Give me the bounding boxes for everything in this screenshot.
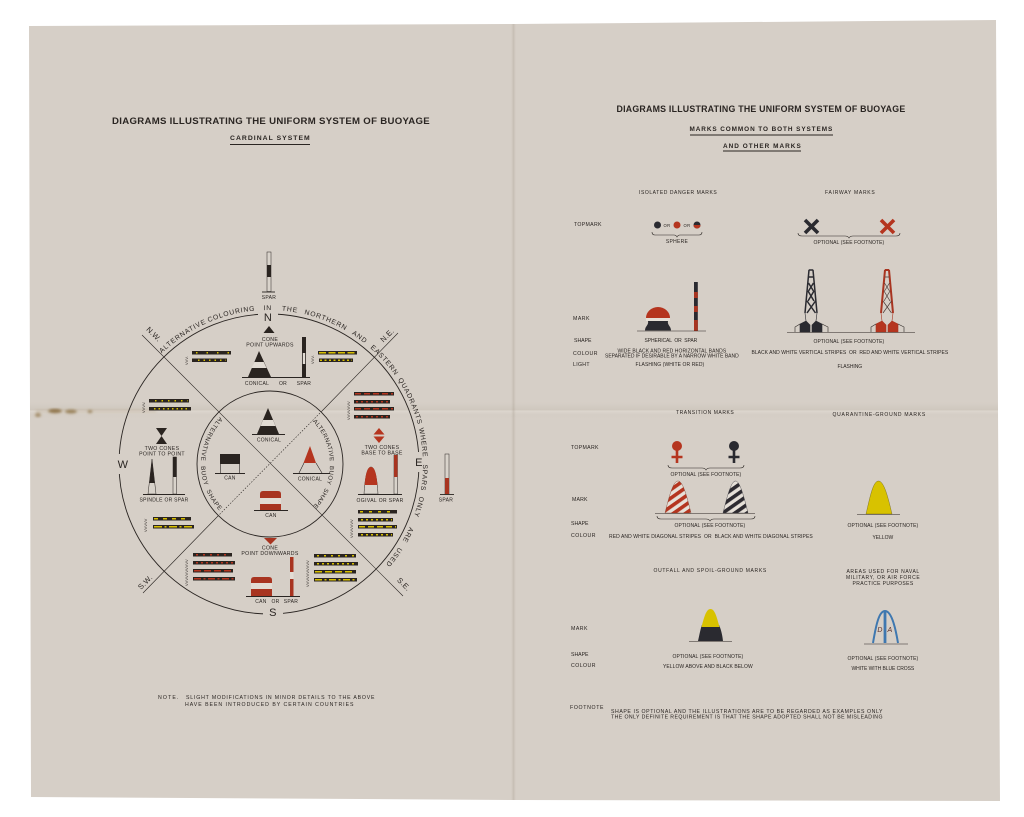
ring caption: alternative colouring: THE: [282, 306, 298, 312]
heading: ISOLATED DANGER MARKS: [639, 190, 717, 196]
topmark spheres: OR: [664, 223, 670, 228]
shape caption: OPTIONAL (SEE FOOTNOTE): [848, 656, 919, 662]
tower baseline: [787, 332, 915, 334]
topmarks: OPTIONAL (SEE FOOTNOTE): [670, 472, 742, 478]
west topmark: TWO CONES: [145, 446, 180, 452]
heading: AREAS USED FOR NAVAL: [846, 569, 920, 575]
heading: FAIRWAY MARKS: [825, 190, 875, 196]
ring caption: alternative colouring: NORTHERN: [304, 310, 347, 330]
light rhythm NW: [141, 351, 231, 413]
panel: isolated danger marks: [605, 190, 739, 368]
ring caption: alternative colouring: ARE: [402, 526, 413, 542]
inner can red: [254, 491, 288, 519]
south topmark: [241, 538, 299, 557]
shape caption: OPTIONAL (SEE FOOTNOTE): [848, 523, 919, 529]
ring caption: alternative colouring: WHERE: [419, 427, 428, 456]
row labels: top section: MARK: [573, 316, 590, 322]
spherical mark and spar: [637, 282, 706, 331]
white mark with blue cross: [864, 611, 908, 644]
inner conical red: [293, 446, 330, 482]
light rhythm E red: VVVVVVV: [346, 401, 351, 420]
row labels: bottom section: MARK: [571, 626, 588, 632]
topmark spheres: OR: [684, 223, 690, 228]
row labels: top section: COLOUR: [573, 351, 598, 357]
row labels: middle section: COLOUR: [571, 533, 596, 539]
heading: QUARANTINE-GROUND MARKS: [832, 412, 926, 418]
north topmark cone: POINT UPWARDS: [246, 342, 294, 348]
topmark spheres: [652, 222, 702, 245]
north spar: [262, 252, 276, 301]
black tower: [795, 270, 828, 332]
south topmark: POINT DOWNWARDS: [241, 551, 299, 557]
topmark crosses: OPTIONAL (SEE FOOTNOTE): [814, 240, 885, 246]
light rhythm E yellow: VVVVVVV: [349, 519, 354, 538]
white mark with blue cross: D: [877, 627, 883, 634]
colour caption: [605, 348, 739, 360]
colour caption: BLACK AND WHITE VERTICAL STRIPES OR RED AND WHITE VERTICAL STRIPES: [752, 350, 949, 356]
row labels: middle section: SHAPE: [571, 521, 589, 527]
heading: PRACTICE PURPOSES: [852, 581, 914, 587]
white mark with blue cross: A: [887, 627, 893, 634]
note: [158, 695, 375, 708]
south can and spar: [246, 557, 300, 605]
north spar: SPAR: [262, 295, 276, 301]
shape caption: OPTIONAL (SEE FOOTNOTE): [672, 654, 744, 660]
topmarks: [668, 441, 744, 478]
panel: fairway marks: [752, 190, 949, 370]
right page subtitle: MARKS COMMON TO BOTH SYSTEMS: [690, 126, 833, 133]
east topmark: [361, 428, 403, 456]
row labels: top section: SHAPE: [574, 338, 592, 344]
ring caption: alternative colouring: IN: [264, 305, 271, 310]
left page title: DIAGRAMS ILLUSTRATING THE UNIFORM SYSTEM OF BUOYAGE: [112, 116, 430, 127]
striped marks: OPTIONAL (SEE FOOTNOTE): [674, 523, 746, 529]
light rhythm NE: VVV.: [310, 355, 315, 364]
light rhythm SE: [305, 554, 358, 587]
cardinal letters: [118, 312, 423, 619]
north conical buoy and spar: SPAR: [297, 381, 311, 387]
yellow mark: [857, 481, 900, 514]
ring caption: alternative colouring: USED: [386, 548, 402, 566]
inner ring caption right: ALTERNATIVE BUOY SHAPE: [312, 420, 334, 509]
panel: outfall and spoil-ground marks: [654, 568, 767, 670]
light rhythm NW: VVV.: [184, 356, 189, 365]
row labels: middle section: [571, 445, 599, 539]
topmark spheres: SPHERE: [666, 239, 689, 245]
light rhythm E red: [346, 392, 394, 420]
quadrant divider lines: [142, 333, 403, 596]
ring caption: alternative colouring: COLOURING: [208, 306, 254, 322]
light rhythm E yellow: [349, 510, 397, 538]
intercardinal labels: S.W.: [136, 573, 154, 591]
note: NOTE.: [158, 695, 179, 701]
ring caption: alternative colouring: EASTERN: [370, 344, 398, 375]
intercardinal labels: S.E.: [395, 576, 412, 593]
inner ring: [197, 391, 343, 537]
row labels: bottom section: [571, 626, 596, 669]
footnote: [570, 705, 883, 720]
cardinal letters: N: [264, 312, 272, 324]
striped marks: [655, 481, 755, 529]
right page subtitle: [690, 126, 833, 151]
ring caption: alternative colouring: ALTERNATIVE: [160, 319, 206, 354]
light caption: FLASHING: [838, 364, 862, 370]
red tower: [871, 270, 904, 332]
light rhythm NE: [310, 351, 357, 364]
inner can black: CAN: [224, 476, 236, 482]
colour caption: YELLOW: [872, 535, 894, 541]
light rhythm W: [143, 517, 194, 532]
west topmark: POINT TO POINT: [139, 452, 185, 458]
south can and spar: SPAR: [284, 599, 298, 605]
heading: MILITARY, OR AIR FORCE: [846, 575, 920, 581]
colour caption: WIDE BLACK AND RED HORIZONTAL BANDS: [618, 348, 727, 354]
east topmark: TWO CONES: [365, 445, 400, 451]
light rhythm SE: VVVVVVVVVV: [305, 560, 310, 587]
south can and spar: CAN: [255, 599, 267, 605]
heading: TRANSITION MARKS: [676, 410, 734, 416]
colour caption: SEPARATED IF DESIRABLE BY A NARROW WHITE BAND: [605, 354, 739, 360]
intercardinal labels: N.W.: [144, 325, 163, 344]
ring caption: alternative colouring: SPARS: [421, 464, 428, 490]
north topmark cone: CONE: [262, 337, 278, 343]
inner conical red: CONICAL: [298, 476, 322, 482]
west spindle and spar: SPINDLE OR SPAR: [140, 498, 189, 504]
row labels: top section: TOPMARK: [574, 222, 602, 228]
ring caption: alternative colouring: [160, 305, 428, 566]
light rhythm SW: VVVVVVVVVV: [184, 559, 189, 586]
row labels: middle section: TOPMARK: [571, 445, 599, 451]
north conical buoy and spar: [242, 337, 311, 387]
row labels: top section: [573, 222, 602, 368]
inner can red: CAN: [265, 513, 277, 519]
east outer spar: SPAR: [439, 498, 453, 504]
colour caption: WHITE WITH BLUE CROSS: [852, 666, 915, 672]
light caption: FLASHING (WHITE OR RED): [636, 362, 705, 368]
shape caption: SPHERICAL OR SPAR: [644, 338, 698, 344]
intercardinal labels: [136, 325, 412, 593]
heading: [846, 569, 920, 587]
ring caption: alternative colouring: ONLY: [414, 497, 424, 518]
cardinal letters: W: [118, 459, 129, 471]
light rhythm SW: [184, 553, 235, 586]
cardinal letters: S: [269, 607, 277, 619]
left page subtitle: cardinal system: CARDINAL SYSTEM: [230, 135, 310, 142]
colour caption: YELLOW ABOVE AND BLACK BELOW: [663, 664, 753, 670]
footnote: THE ONLY DEFINITE REQUIREMENT IS THAT THE SHAPE ADOPTED SHALL NOT BE MISLEADING: [611, 714, 883, 720]
east topmark: BASE TO BASE: [361, 450, 403, 456]
footnote: FOOTNOTE: [570, 705, 604, 711]
panel: quarantine-ground marks: [832, 412, 926, 541]
row labels: bottom section: SHAPE: [571, 652, 589, 658]
panel: areas used for naval, military or air force: [846, 569, 920, 672]
north conical buoy and spar: OR: [279, 381, 287, 387]
compass diagram: [118, 252, 454, 619]
ring caption: alternative colouring: AND: [352, 331, 366, 342]
south topmark: CONE: [262, 546, 278, 552]
north topmark cone: [246, 326, 294, 348]
inner can black: [215, 454, 245, 482]
cardinal letters: E: [415, 457, 423, 469]
ring caption: alternative colouring: QUADRANTS: [398, 378, 422, 424]
east ogival and spar: [356, 455, 404, 504]
colour caption: RED AND WHITE DIAGONAL STRIPES OR BLACK AND WHITE DIAGONAL STRIPES: [609, 534, 813, 540]
panel: transition marks: [609, 410, 813, 540]
shape caption: OPTIONAL (SEE FOOTNOTE): [814, 339, 885, 345]
topmark crosses: [798, 220, 900, 246]
right page subtitle: AND OTHER MARKS: [723, 143, 801, 150]
row labels: bottom section: COLOUR: [571, 663, 596, 669]
intercardinal labels: N.E.: [378, 326, 396, 344]
yellow and black mark: [689, 609, 732, 642]
inner conical black: CONICAL: [257, 438, 281, 444]
row labels: middle section: MARK: [572, 497, 588, 503]
south can and spar: OR: [271, 599, 280, 605]
light rhythm W: VVVVV: [143, 518, 148, 532]
footnote: SHAPE IS OPTIONAL AND THE ILLUSTRATIONS ARE TO BE REGARDED AS EXAMPLES ONLY: [611, 709, 883, 715]
row labels: top section: LIGHT: [573, 362, 590, 368]
right page title: DIAGRAMS ILLUSTRATING THE UNIFORM SYSTEM OF BUOYAGE: [616, 104, 906, 114]
heading: OUTFALL AND SPOIL-GROUND MARKS: [654, 568, 767, 574]
note: SLIGHT MODIFICATIONS IN MINOR DETAILS TO THE ABOVE: [186, 695, 375, 701]
inner ring caption left: ALTERNATIVE BUOY SHAPE: [201, 417, 222, 510]
north conical buoy and spar: CONICAL: [245, 381, 269, 387]
west topmark: [139, 428, 185, 458]
outer ring with gaps: [113, 308, 427, 619]
inner conical black: [252, 408, 285, 444]
east ogival and spar: OGIVAL OR SPAR: [356, 498, 404, 504]
light rhythm NW: VVVV.: [141, 402, 146, 413]
east outer spar: [439, 454, 454, 504]
west spindle and spar: [140, 457, 189, 504]
note: HAVE BEEN INTRODUCED BY CERTAIN COUNTRIES: [185, 702, 354, 708]
